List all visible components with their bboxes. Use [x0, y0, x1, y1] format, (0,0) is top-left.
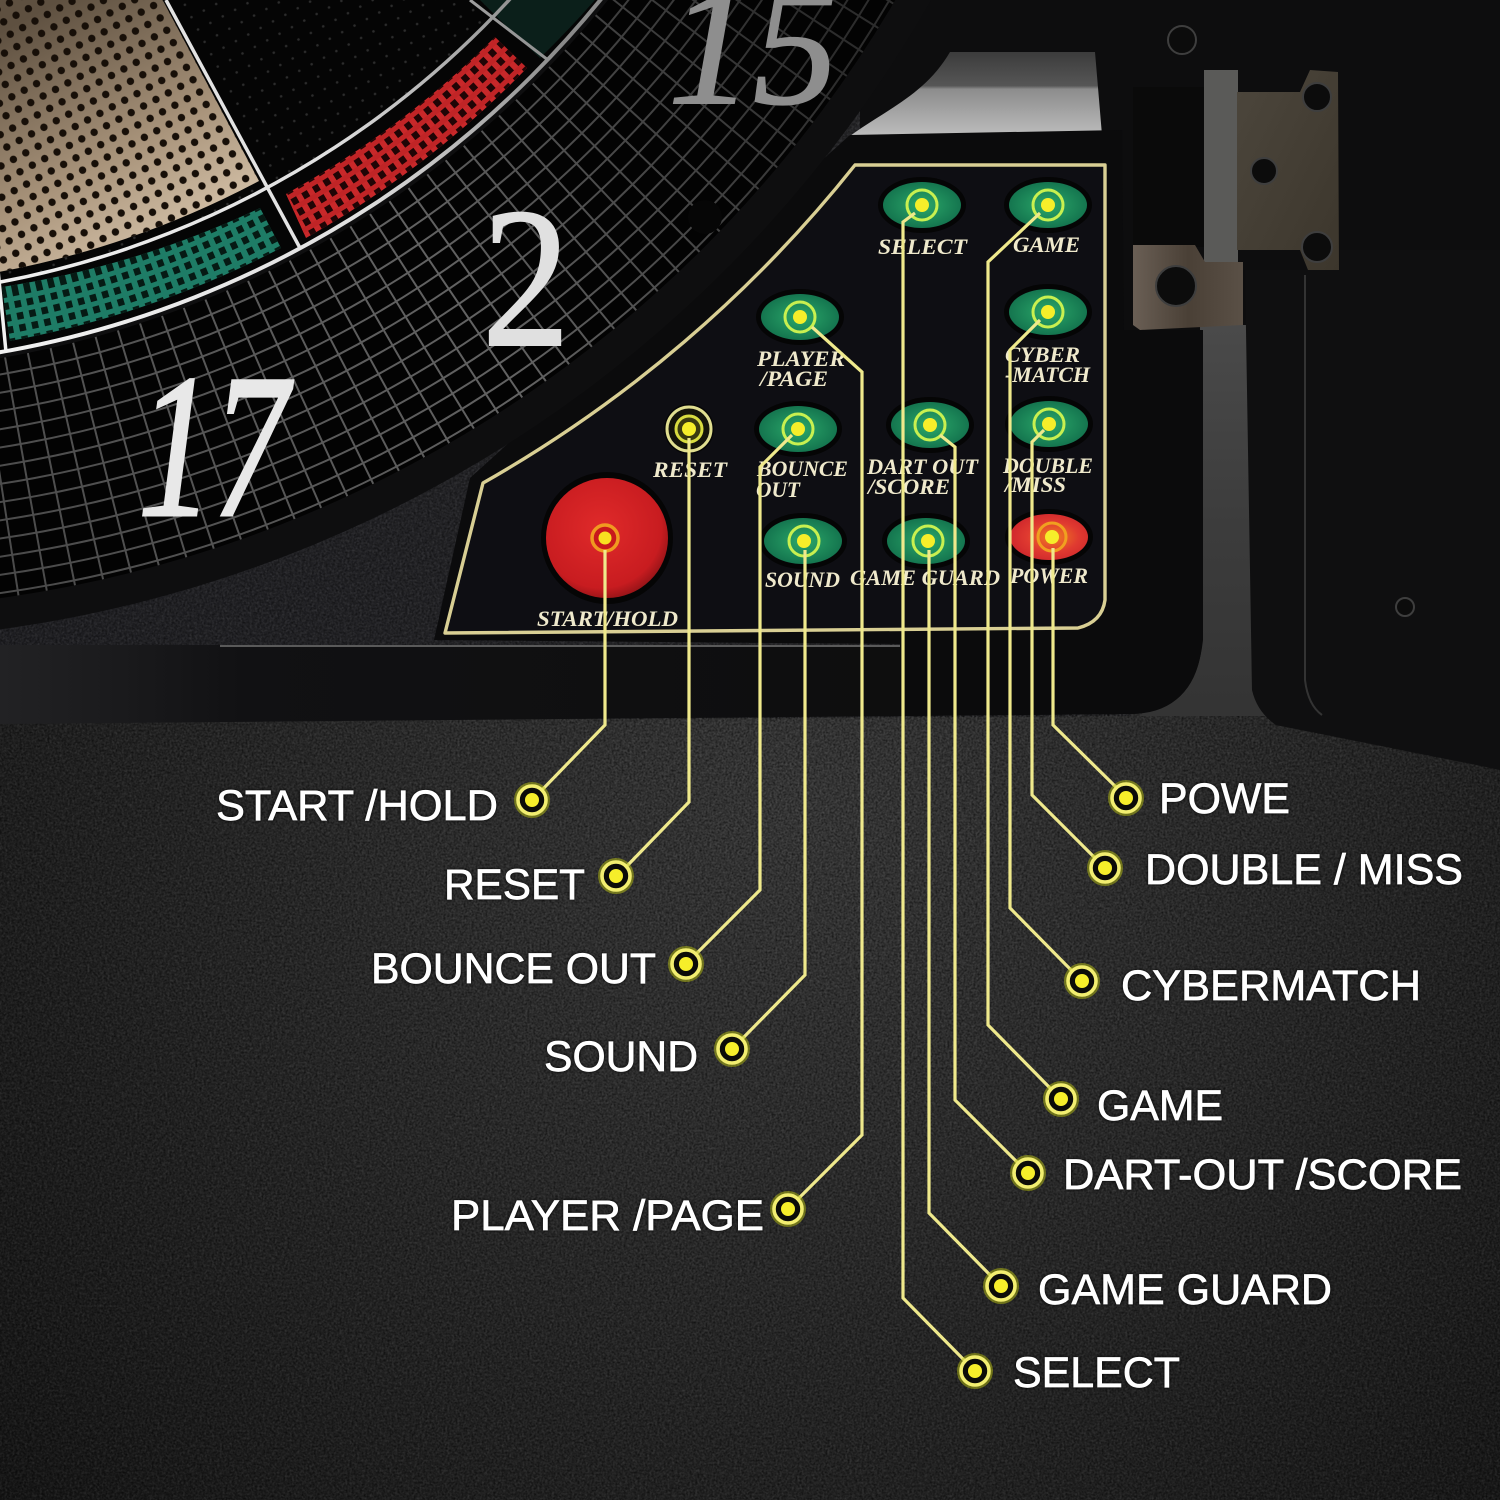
grey wall sliver	[850, 52, 1102, 136]
button: start hold: START/HOLD	[537, 606, 678, 631]
callout: DOUBLE / MISS: DOUBLE / MISS	[1145, 846, 1463, 894]
button: dart out score: DART OUT	[866, 454, 980, 479]
dartboard cabinet body	[0, 0, 1250, 730]
callout: BOUNCE OUT: BOUNCE OUT	[371, 945, 656, 993]
number 2: 2	[482, 168, 570, 389]
callout: DART-OUT /SCORE	[940, 435, 1462, 1199]
callout: DART-OUT /SCORE: DART-OUT /SCORE	[1063, 1151, 1462, 1199]
button: reset: RESET	[652, 457, 729, 482]
button: sound	[759, 513, 847, 592]
button: game guard	[850, 513, 1000, 590]
panel dark frame	[434, 130, 1203, 716]
callout: PLAYER /PAGE	[451, 327, 862, 1240]
button: double miss: DOUBLE	[1002, 453, 1093, 478]
button: player page	[756, 289, 845, 391]
button: dart out score	[866, 397, 980, 499]
button: player page: PLAYER	[756, 346, 845, 371]
callout: SELECT: SELECT	[1013, 1349, 1180, 1397]
button: dart out score: /SCORE	[866, 474, 950, 499]
button: cyber match: CYBER	[1005, 342, 1080, 367]
lower dark band	[0, 645, 1202, 724]
callout: CYBERMATCH	[1010, 320, 1421, 1010]
single area black	[0, 0, 823, 367]
button: player page: /PAGE	[758, 366, 828, 391]
next green segment	[480, 0, 595, 58]
callout: SELECT	[903, 213, 1180, 1397]
callout: PLAYER /PAGE: PLAYER /PAGE	[451, 1192, 764, 1240]
callout: CYBERMATCH: CYBERMATCH	[1121, 962, 1421, 1010]
callout: START /HOLD	[216, 550, 605, 830]
red double segment	[286, 37, 527, 238]
button: power	[1005, 509, 1093, 588]
callout: POWE	[1053, 548, 1290, 823]
callout: GAME GUARD	[929, 550, 1332, 1314]
button: cyber match: -MATCH	[1005, 362, 1091, 387]
grey stripe behind frame	[1140, 325, 1268, 716]
button: double miss: /MISS	[1003, 472, 1066, 497]
button: select: SELECT	[878, 234, 969, 259]
button: double miss	[1002, 396, 1093, 497]
callout: DOUBLE / MISS	[1032, 430, 1463, 894]
floor background	[0, 325, 1500, 1500]
board peg	[688, 200, 722, 234]
callout: GAME: GAME	[1097, 1082, 1223, 1130]
button: reset	[652, 404, 729, 482]
cabinet door	[1245, 250, 1500, 770]
button: game	[1004, 177, 1092, 257]
callout: SOUND: SOUND	[544, 1033, 698, 1081]
button: select	[878, 177, 969, 259]
panel background with gold outline	[445, 165, 1105, 633]
spider wires	[0, 0, 823, 367]
button: cyber match	[1004, 284, 1092, 387]
button: game guard: GAME GUARD	[850, 565, 1000, 590]
band highlight line	[220, 645, 1130, 647]
dartboard	[0, 0, 895, 630]
board rim	[0, 0, 1097, 641]
green double segment	[2, 208, 281, 341]
button: bounce out: BOUNCE	[756, 456, 848, 481]
callout: GAME	[988, 213, 1223, 1130]
number 17: 17	[138, 333, 293, 560]
callout: RESET	[444, 438, 689, 909]
beige segment	[0, 0, 259, 272]
callout: POWE: POWE	[1159, 775, 1290, 823]
callout: RESET: RESET	[444, 861, 585, 909]
button: bounce out	[754, 401, 848, 502]
callout: GAME GUARD: GAME GUARD	[1038, 1266, 1332, 1314]
callout: START /HOLD: START /HOLD	[216, 782, 498, 830]
button: sound: SOUND	[765, 567, 840, 592]
button: power: POWER	[1009, 563, 1088, 588]
button: bounce out: OUT	[756, 477, 802, 502]
hinge assembly	[1133, 26, 1339, 330]
outer number ring mesh	[0, 0, 895, 598]
callout: SOUND	[544, 550, 805, 1081]
button: game: GAME	[1013, 232, 1080, 257]
control panel	[445, 165, 1105, 633]
button: start hold	[537, 472, 678, 631]
upper right dark backing	[860, 0, 1500, 340]
callout: BOUNCE OUT	[371, 435, 792, 993]
